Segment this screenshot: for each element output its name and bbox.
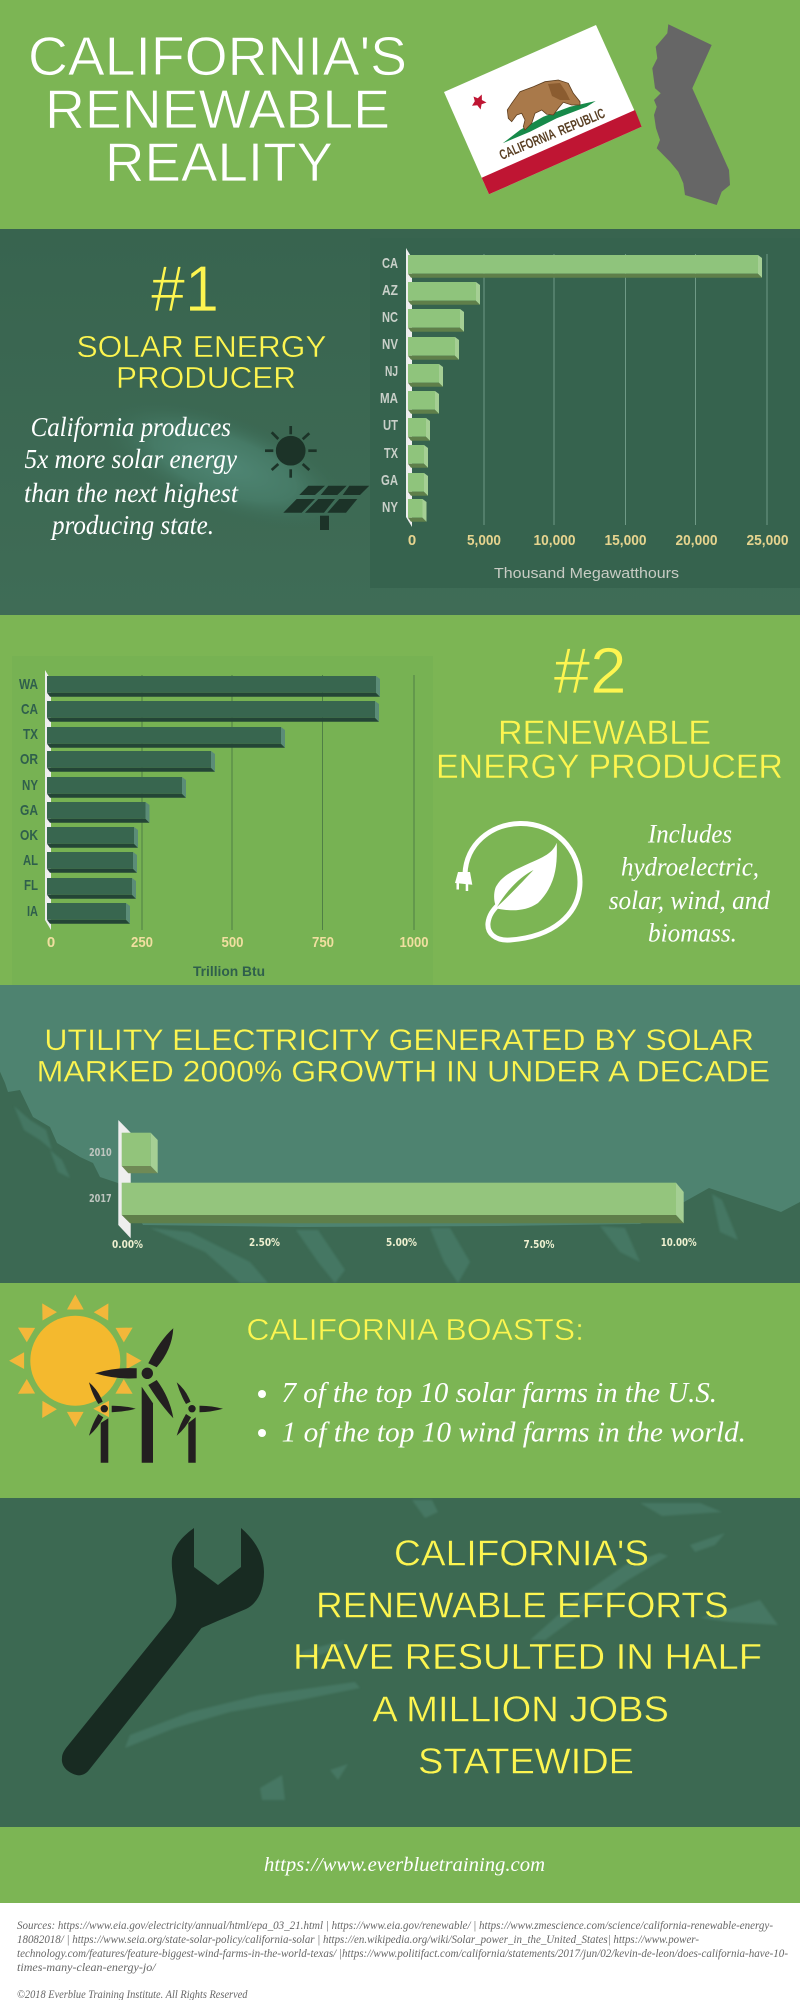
chart axis title: Trillion Btu (193, 963, 265, 979)
sources text: 18082018/ | https://www.seia.org/state-solar-policy/california-solar | https://en.wikipedia.org/wiki/Solar_power_in_the_United_States| https://www.power- (17, 1932, 699, 1946)
chart category labels: NV (382, 336, 398, 353)
chart category labels: AZ (382, 282, 398, 299)
chart axis title: Thousand Megawatthours (494, 565, 679, 582)
heading: renewable energy producer: ENERGY PRODUCER (436, 748, 783, 786)
bar: MA (408, 391, 439, 414)
chart category labels: GA (20, 802, 38, 819)
bar: 2010 (122, 1133, 158, 1173)
website url: https://www.everbluetraining.com (264, 1854, 545, 1876)
bar: UT (408, 418, 430, 441)
heading: renewable energy producer: RENEWABLE (498, 714, 711, 752)
text block: included sources: hydroelectric, (621, 853, 759, 882)
chart value axis labels: 1000 (400, 934, 428, 951)
text block: included sources: Includes (647, 820, 732, 849)
chart category labels: AL (23, 852, 38, 869)
panel: renewable energy producer (0, 615, 800, 985)
chart category labels: NY (382, 499, 398, 516)
chart value axis labels: 15,000 (604, 532, 646, 549)
chart category labels: MA (380, 390, 398, 407)
chart category labels: NY (22, 777, 38, 794)
bar: FL (47, 878, 136, 899)
chart value axis labels (112, 1237, 697, 1251)
icon: California state silhouette (652, 24, 730, 205)
chart category labels (89, 1147, 112, 1205)
heading: solar energy producer (76, 329, 326, 395)
decorative texture (125, 1500, 778, 1800)
heading: utility electricity growth (37, 1024, 770, 1089)
chart category labels: TX (384, 445, 398, 462)
text block: solar comparison: producing state. (50, 510, 214, 540)
panel: header (0, 0, 800, 229)
heading: utility electricity growth: UTILITY ELECTRICITY GENERATED BY SOLAR (44, 1024, 754, 1057)
chart value axis labels: 25,000 (746, 532, 788, 549)
panel: jobs (0, 1498, 800, 1827)
chart value axis labels: 0 (408, 532, 416, 549)
bar: AZ (408, 282, 480, 305)
text block: solar comparison: 5x more solar energy (24, 444, 237, 474)
chart value axis labels: 10,000 (534, 532, 576, 549)
text block: half a million jobs: CALIFORNIA'S (394, 1533, 649, 1574)
panel: California boasts (0, 1283, 800, 1498)
chart category labels: NC (382, 309, 398, 326)
title: REALITY (105, 131, 333, 193)
chart value axis labels: 0.00% (112, 1239, 143, 1251)
large turbine (95, 1328, 173, 1463)
icon: California flag: CALIFORNIA REPUBLIC (497, 105, 607, 163)
text block: solar comparison: than the next highest (24, 478, 239, 508)
bar: WA (47, 676, 380, 697)
text block: half a million jobs: HAVE RESULTED IN HALF (293, 1636, 762, 1677)
chart category labels: CA (382, 255, 398, 272)
bar: NV (408, 337, 459, 360)
title: CALIFORNIA'S (28, 25, 407, 87)
text block: half a million jobs (293, 1533, 762, 1782)
chart category labels: WA (19, 676, 38, 693)
panel: website band (0, 1827, 800, 1903)
chart value axis labels: 10.00% (661, 1237, 697, 1249)
bar: 2017 (122, 1183, 684, 1223)
bar: AL (47, 852, 137, 873)
heading: utility electricity growth: MARKED 2000% GROWTH IN UNDER A DECADE (37, 1056, 770, 1089)
text block: included sources (609, 820, 771, 948)
icon: sun (9, 1294, 141, 1427)
icon: California flag (444, 25, 642, 194)
text block: solar comparison: California produces (31, 412, 231, 442)
chart value axis labels: 0 (47, 934, 55, 951)
icon: sun (265, 426, 317, 478)
chart category labels (19, 676, 38, 920)
bar: NY (47, 777, 186, 798)
chart category labels: UT (383, 417, 398, 434)
chart category labels: FL (24, 877, 38, 894)
bullet list: farms: 1 of the top 10 wind farms in the world. (282, 1417, 746, 1449)
chart: solar share 2010 vs 2017 (89, 1120, 697, 1251)
bar: NJ (408, 364, 443, 387)
heading: solar energy producer: SOLAR ENERGY (76, 329, 326, 364)
sources text: times-many-clean-energy-jo/ (17, 1960, 157, 1974)
bar: CA (47, 701, 379, 722)
chart category labels: GA (381, 472, 398, 489)
bar: GA (47, 802, 150, 823)
bar: NC (408, 309, 464, 332)
bullet list: farms: 7 of the top 10 solar farms in the U.S. (282, 1377, 717, 1409)
chart category labels: CA (21, 701, 38, 718)
icon: wind turbines (89, 1328, 223, 1463)
chart category labels: NJ (385, 363, 398, 380)
icon: wrench (62, 1528, 264, 1775)
chart category labels: OK (20, 827, 38, 844)
text block: solar comparison (24, 412, 239, 540)
bar: GA (408, 473, 428, 496)
chart value axis labels: 750 (312, 934, 334, 951)
text block: half a million jobs: A MILLION JOBS (372, 1689, 669, 1730)
panel: solar energy producer (0, 229, 800, 615)
chart value axis labels: 250 (131, 934, 153, 951)
chart value axis labels: 2.50% (249, 1237, 280, 1249)
text block: half a million jobs: STATEWIDE (418, 1741, 634, 1782)
heading: renewable energy producer (436, 714, 783, 786)
bar: OK (47, 827, 138, 848)
icon: leaf and plug (455, 823, 580, 940)
decorative mountains (0, 1072, 800, 1283)
chart category labels: 2017 (89, 1193, 112, 1205)
heading: #1: #1 (151, 252, 219, 325)
chart value axis labels: 500 (222, 934, 244, 951)
bar: CA (408, 255, 762, 278)
chart category labels (380, 255, 398, 516)
chart value axis labels: 5.00% (386, 1237, 417, 1249)
sources text (17, 1918, 788, 2000)
panel: solar growth (0, 985, 800, 1283)
chart: solar generation by state (370, 238, 800, 588)
chart category labels: TX (23, 726, 38, 743)
decorative light glow (81, 372, 369, 558)
text block: included sources: biomass. (648, 919, 737, 948)
chart value axis labels (47, 934, 428, 951)
small left turbine (89, 1382, 136, 1463)
chart value axis labels: 5,000 (467, 532, 501, 549)
small right turbine (177, 1382, 223, 1463)
title: RENEWABLE (45, 78, 390, 140)
icon: solar panel (283, 486, 369, 530)
bar: IA (47, 903, 130, 924)
heading: #2: #2 (554, 634, 627, 707)
chart category labels: 2010 (89, 1147, 112, 1159)
bullet list: farms (258, 1377, 746, 1449)
chart category labels: OR (20, 751, 38, 768)
text block: included sources: solar, wind, and (609, 886, 771, 915)
chart value axis labels: 7.50% (524, 1239, 555, 1251)
bar: TX (408, 445, 428, 468)
chart value axis labels (408, 532, 788, 549)
chart category labels: IA (27, 903, 38, 920)
bar: NY (408, 499, 426, 522)
heading: solar energy producer: PRODUCER (116, 360, 296, 395)
heading: California boasts: CALIFORNIA BOASTS: (246, 1312, 584, 1347)
bar: OR (47, 751, 215, 772)
chart value axis labels: 20,000 (676, 532, 718, 549)
title (28, 25, 407, 193)
bar: TX (47, 727, 285, 748)
chart: renewable generation by state (12, 656, 433, 985)
text block: half a million jobs: RENEWABLE EFFORTS (316, 1585, 729, 1626)
